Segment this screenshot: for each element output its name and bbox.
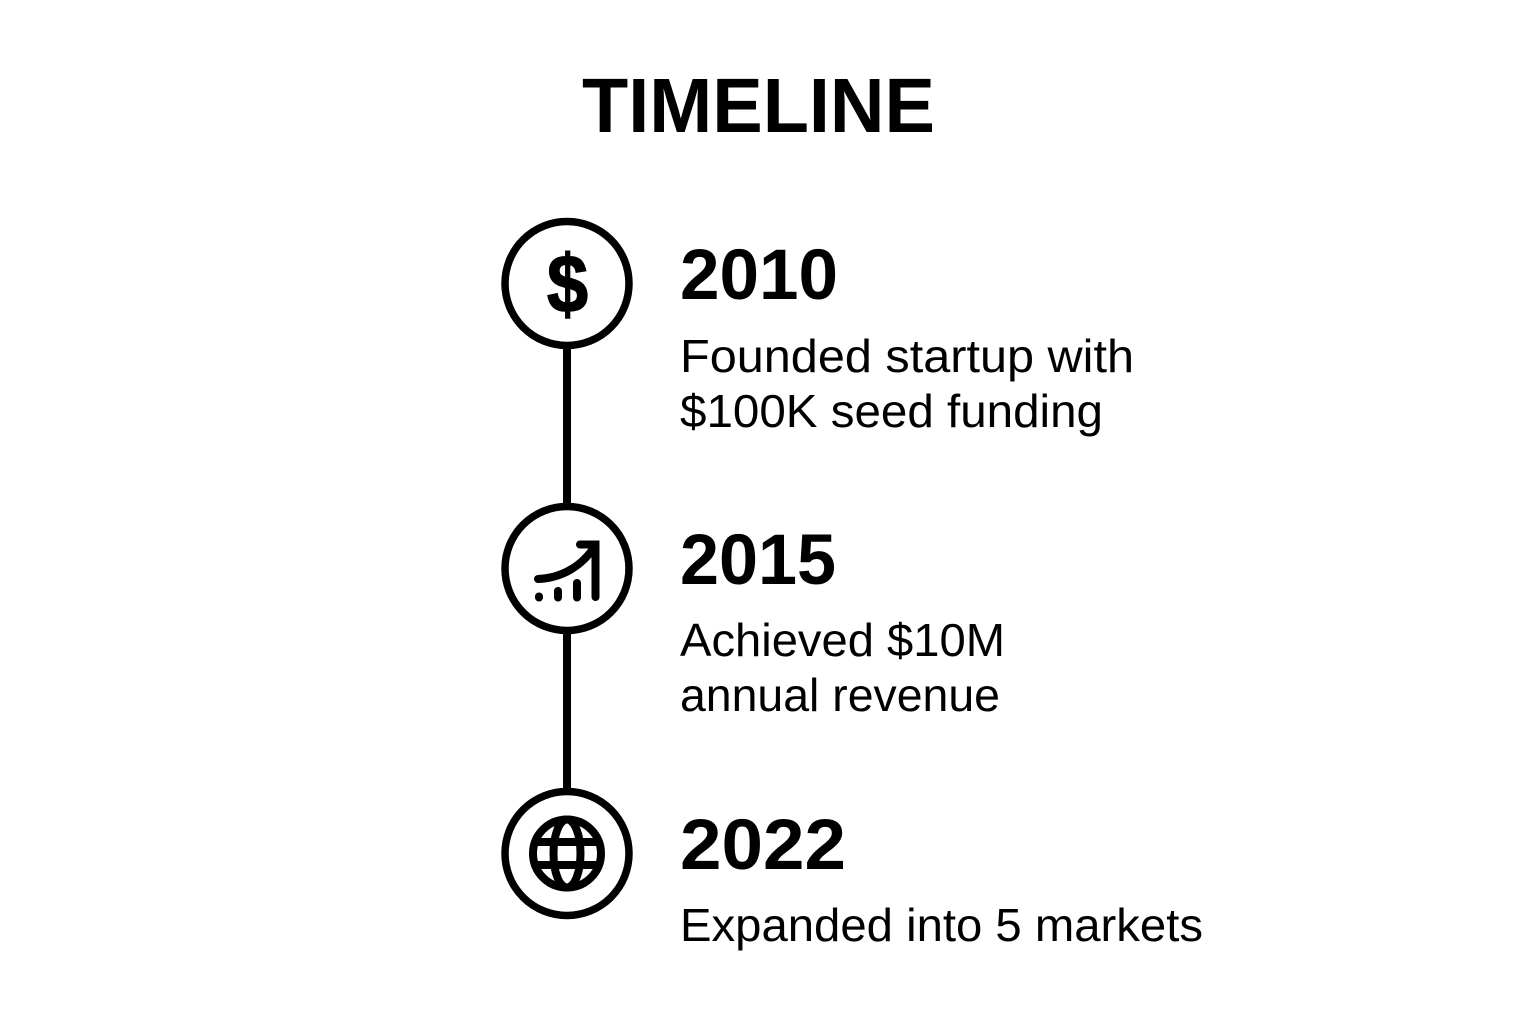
title: TIMELINE (582, 63, 935, 149)
description 2015: Achieved $10M (680, 614, 1005, 666)
icon: dollar sign (505, 222, 629, 346)
milestone 2015 (505, 506, 1005, 721)
icon: globe (505, 792, 629, 916)
description 2022: Expanded into 5 markets (680, 899, 1203, 951)
description 2015: annual revenue (680, 669, 1000, 721)
icon: growth chart (505, 506, 629, 630)
description 2010: Founded startup with (680, 330, 1134, 382)
icon: dollar sign: $ (547, 239, 588, 330)
description 2010 (680, 330, 1134, 437)
timeline connector line (563, 340, 571, 795)
milestone 2010 (505, 222, 1134, 437)
year 2015: 2015 (680, 521, 836, 600)
description 2015 (680, 614, 1005, 721)
description 2010: $100K seed funding (680, 385, 1103, 437)
year 2022: 2022 (680, 806, 846, 885)
year 2010: 2010 (680, 236, 838, 315)
milestone 2022 (505, 792, 1203, 951)
